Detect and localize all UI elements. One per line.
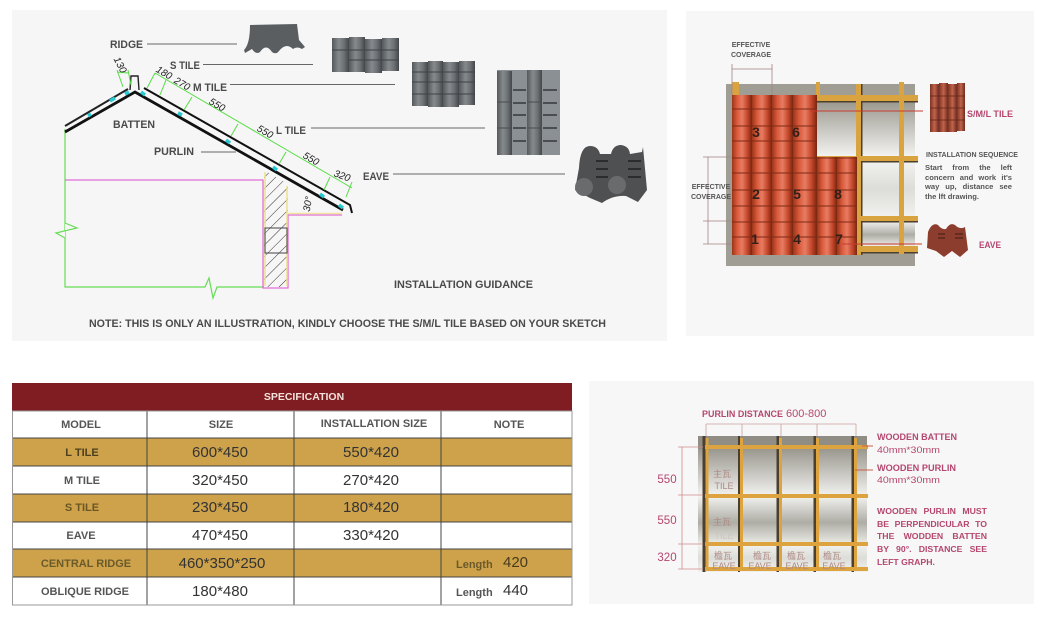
text block: purlin note: BE PERPENDICULAR TO [877, 519, 987, 529]
panel: installation guidance roof section [12, 10, 667, 341]
icon: M tile [412, 61, 475, 107]
part labels: PURLIN [154, 146, 194, 158]
frame backing [698, 436, 867, 572]
text block: installation sequence: concern and work it's [925, 173, 1012, 182]
dimension lines [117, 70, 352, 197]
part labels [110, 39, 389, 183]
label: effective coverage top: COVERAGE [731, 52, 771, 59]
text block: purlin note: LEFT GRAPH. [877, 557, 935, 567]
gold rows [12, 438, 572, 577]
row: eave: EAVE [66, 530, 96, 542]
cell labels: 檐瓦 [753, 550, 771, 561]
left dimensions [657, 474, 677, 564]
icon: S tile [332, 37, 399, 73]
dimension numbers: 550 [207, 96, 227, 115]
cell labels: TILE [714, 531, 734, 541]
part labels: RIDGE [110, 39, 143, 51]
row: S tile: S TILE [65, 502, 99, 514]
row: M tile [64, 472, 399, 489]
row: eave [66, 527, 399, 544]
row: S tile [65, 499, 399, 516]
row: oblique ridge: OBLIQUE RIDGE [41, 586, 129, 598]
left dimensions: 320 [657, 552, 677, 564]
row: S tile: 230*450 [192, 499, 248, 516]
frame wood [702, 436, 868, 572]
part labels: L TILE [276, 125, 306, 137]
row: central ridge: CENTRAL RIDGE [41, 558, 131, 570]
label: effective coverage left: EFFECTIVE [692, 184, 731, 191]
icon: red S/M/L tile [930, 83, 965, 132]
table grid [12, 411, 572, 605]
dimension numbers: 550 [301, 150, 321, 169]
sequence numbers: 2 [752, 186, 760, 202]
row: L tile: L TILE [65, 447, 99, 459]
label: effective coverage left: COVERAGE [691, 194, 731, 201]
dimension numbers: 180 [154, 64, 174, 83]
heading: installation guidance: INSTALLATION GUIDANCE [394, 279, 533, 291]
dimension numbers: 130 [111, 55, 129, 76]
sequence numbers: 7 [835, 231, 843, 247]
dimension numbers: 550 [255, 123, 275, 142]
row: central ridge: 460*350*250 [179, 555, 265, 572]
text block: installation sequence: way up, distance see [925, 182, 1012, 191]
label: S/M/L tile: S/M/L TILE [967, 109, 1013, 120]
left dimensions: 550 [657, 474, 677, 486]
cell labels: 檐瓦 [823, 550, 841, 561]
part labels: S TILE [170, 60, 200, 72]
sequence numbers [751, 124, 843, 247]
row: M tile: 270*420 [343, 472, 399, 489]
cell labels [712, 468, 846, 571]
panel: batten and purlin layout [589, 381, 1034, 604]
label: eave: EAVE [979, 240, 1001, 251]
table body [12, 411, 572, 605]
panel: installation sequence [686, 11, 1034, 336]
text block: purlin note [877, 506, 987, 567]
sequence numbers: 3 [752, 124, 760, 140]
text block: installation sequence: Start from the left [925, 163, 1012, 172]
part labels: M TILE [193, 82, 227, 94]
row: oblique ridge: Length [456, 587, 493, 599]
row: L tile: 600*450 [192, 444, 248, 461]
cell labels: EAVE [785, 561, 809, 571]
row: eave: 330*420 [343, 527, 399, 544]
cell labels: 主瓦 [713, 468, 731, 479]
label: wooden purlin: WOODEN PURLIN [877, 463, 956, 474]
table header [12, 383, 572, 411]
text block: purlin note: BY 90°. DISTANCE SEE [877, 544, 987, 554]
row: eave: 470*450 [192, 527, 248, 544]
cell labels: EAVE [748, 561, 772, 571]
label: purlin distance: 600-800 [786, 408, 826, 420]
wooden battens and purlins [732, 82, 918, 255]
row: oblique ridge [41, 582, 528, 600]
cell labels: EAVE [712, 561, 736, 571]
sequence numbers: 1 [751, 231, 759, 247]
row: central ridge: Length [456, 559, 493, 571]
cell labels: 檐瓦 [787, 550, 805, 561]
cell labels: EAVE [822, 561, 846, 571]
row: L tile: 550*420 [343, 444, 399, 461]
label: purlin distance: PURLIN DISTANCE [702, 409, 783, 420]
row: central ridge: 420 [503, 554, 528, 571]
row: S tile: 180*420 [343, 499, 399, 516]
icon: red eave tile [927, 224, 968, 257]
callout lines [810, 111, 923, 244]
label: wooden batten [877, 432, 957, 456]
note: NOTE: THIS IS ONLY AN ILLUSTRATION, KINDLY CHOOSE THE S/M/L TILE BASED ON YOUR SKETCH [89, 318, 606, 330]
specification table: SPECIFICATION [264, 391, 344, 403]
text block: purlin note: THE WODDEN BATTEN [877, 531, 987, 541]
roof section drawing [56, 76, 352, 298]
column headings: MODEL [61, 419, 101, 431]
icon: ridge tile [244, 24, 305, 53]
row: central ridge [41, 554, 528, 572]
dimension numbers: 270 [171, 75, 192, 94]
icon: L tile [497, 70, 560, 155]
red tiles [732, 95, 857, 255]
callout lines [855, 446, 873, 470]
column headings [61, 418, 524, 431]
row: oblique ridge: 180*480 [192, 583, 248, 600]
dimension numbers [111, 55, 352, 212]
row: M tile: 320*450 [192, 472, 248, 489]
roof backing [726, 84, 915, 266]
sequence numbers: 8 [834, 186, 842, 202]
row: L tile [65, 444, 399, 461]
sequence numbers: 6 [792, 124, 800, 140]
row: oblique ridge: 440 [503, 582, 528, 599]
left dimension bracket [678, 447, 703, 569]
heading: installation sequence: INSTALLATION SEQUENCE [926, 150, 1018, 159]
text block: installation sequence [925, 163, 1012, 201]
effective coverage brackets [703, 64, 772, 244]
label: wooden purlin [877, 463, 956, 486]
sequence numbers: 4 [793, 231, 801, 247]
column headings: INSTALLATION SIZE [321, 418, 427, 430]
column headings: NOTE [494, 419, 524, 431]
dimension numbers: 30° [302, 196, 315, 212]
label: wooden purlin: 40mm*30mm [877, 475, 940, 486]
cell labels: TILE [714, 481, 734, 491]
left dimensions: 550 [657, 515, 677, 527]
part labels: EAVE [363, 171, 389, 183]
dimension numbers: 320 [332, 168, 352, 185]
purlin distance bracket [706, 424, 856, 436]
label: wooden batten: 40mm*30mm [877, 445, 940, 456]
label: effective coverage top: EFFECTIVE [732, 42, 771, 49]
label: wooden batten: WOODEN BATTEN [877, 432, 957, 443]
text block: installation sequence: the lft drawing. [925, 192, 979, 201]
leader lines [147, 44, 565, 174]
icon: eave tile [575, 145, 647, 203]
text block: purlin note: WOODEN PURLIN MUST [877, 506, 987, 516]
sequence numbers: 5 [793, 186, 801, 202]
part labels: BATTEN [113, 119, 155, 131]
row: M tile: M TILE [64, 475, 100, 487]
specification table [12, 383, 572, 605]
cell labels: 主瓦 [713, 516, 731, 527]
column headings: SIZE [209, 419, 233, 431]
cell labels: 檐瓦 [714, 550, 732, 561]
